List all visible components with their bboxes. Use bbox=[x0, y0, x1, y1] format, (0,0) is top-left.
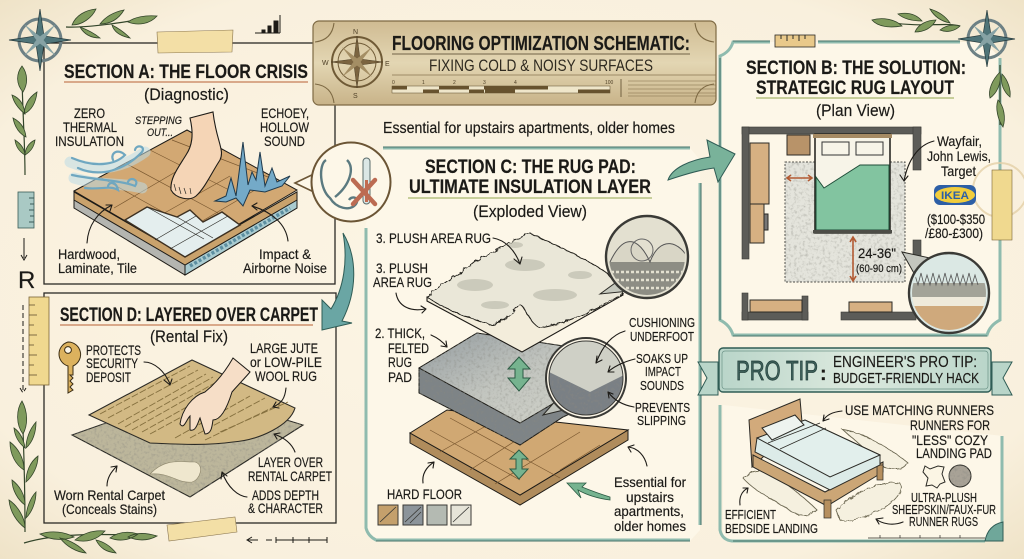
arrows: section D callouts bbox=[107, 362, 295, 497]
red dimension arrows bbox=[787, 175, 856, 281]
text: budget-friendly hack: BUDGET-FRIENDLY HACK bbox=[833, 370, 979, 387]
arrow: green from C to B bbox=[668, 140, 735, 182]
label: essential for upstairs apartments: older homes bbox=[614, 518, 686, 534]
label: thick felted rug pad: FELTED bbox=[388, 340, 429, 356]
arrow: dashed down line bbox=[20, 305, 26, 393]
tape: top section A bbox=[157, 30, 233, 53]
label: plush area rug side bbox=[373, 260, 432, 290]
label: retailers: Target bbox=[941, 163, 976, 179]
pillow bbox=[762, 415, 804, 440]
leaves: top right branch bbox=[872, 9, 960, 32]
leaves: right vertical branch bbox=[989, 65, 1010, 127]
label: ultra plush runner rugs: ULTRA-PLUSH bbox=[911, 491, 977, 505]
label: price range: /£80-£300) bbox=[925, 226, 983, 241]
icon: compass top left bbox=[9, 9, 71, 71]
heading: section B bbox=[746, 58, 966, 99]
label: thick felted rug pad: 2. THICK, bbox=[375, 325, 425, 341]
label: rug clearance dimension: (60-90 cm) bbox=[856, 263, 902, 275]
scale bar: 4 bbox=[514, 80, 517, 86]
frame bbox=[753, 455, 883, 506]
label: plush area rug side: AREA RUG bbox=[373, 274, 432, 290]
label: adds depth and character: & CHARACTER bbox=[248, 500, 323, 516]
compass rose: W bbox=[322, 60, 329, 67]
scale bar: 100 bbox=[605, 80, 614, 86]
label: cushioning underfoot: UNDERFOOT bbox=[630, 329, 694, 344]
bed with green duvet bbox=[813, 134, 892, 234]
label: efficient bedside landing: BEDSIDE LANDING bbox=[725, 522, 818, 536]
illustration: layered floor cross-section bbox=[74, 130, 297, 275]
icon: yellow ruler tape bbox=[29, 297, 49, 385]
label: layer over rental carpet: RENTAL CARPET bbox=[248, 468, 332, 484]
label: ultra plush runner rugs: RUNNER RUGS bbox=[909, 515, 978, 529]
arrow: green pointer to floor bbox=[567, 483, 610, 500]
label: large jute or low-pile wool rug: WOOL RUG bbox=[255, 368, 317, 384]
heading: section C: SECTION C: THE RUG PAD: bbox=[425, 157, 636, 178]
icon: short down arrow bbox=[21, 238, 27, 260]
label: echoey hollow sound: HOLLOW bbox=[260, 119, 310, 135]
icon: green arrow between pad and floor bbox=[510, 450, 528, 479]
label: large jute or low-pile wool rug bbox=[250, 340, 322, 384]
label: stepping out bbox=[135, 115, 182, 139]
panel: section D layered over carpet bbox=[44, 293, 336, 523]
icon: fur ball swatch bbox=[949, 465, 971, 487]
label: thick felted rug pad bbox=[375, 325, 429, 385]
label: impact and airborne noise: Airborne Noise bbox=[243, 260, 327, 276]
label: zero thermal insulation: INSULATION bbox=[55, 133, 124, 149]
letter mark R: R bbox=[18, 267, 35, 294]
legend: material swatches bbox=[378, 505, 471, 525]
label: worn rental carpet: (Conceals Stains) bbox=[62, 501, 157, 517]
label: essential for upstairs apartments: upstairs bbox=[626, 489, 674, 505]
icon: magnifier pad detail bbox=[543, 338, 626, 418]
callout: diagnostic bubble with stethoscope bbox=[295, 142, 390, 222]
label: price range: ($100-$350 bbox=[927, 212, 985, 227]
label: protects security deposit: PROTECTS bbox=[86, 342, 141, 358]
ribbon: pro tip banner bbox=[698, 348, 1012, 395]
label: zero thermal insulation: ZERO bbox=[74, 105, 105, 121]
icon: sheepskin outline bbox=[923, 466, 945, 488]
label: soaks up impact sounds bbox=[636, 351, 688, 393]
compass rose: S bbox=[353, 93, 358, 100]
leaves: left vertical branch bbox=[12, 66, 37, 175]
heading: section C bbox=[409, 157, 651, 198]
illustration: plush area rug layer bbox=[427, 233, 623, 352]
left runner bbox=[743, 471, 817, 516]
icon: sound spike wave bbox=[215, 142, 290, 206]
text: pro tip large: PRO TIP bbox=[736, 355, 818, 386]
mattress bbox=[755, 420, 880, 490]
label: echoey hollow sound: SOUND bbox=[264, 133, 305, 149]
corner: teal scale badge bbox=[985, 522, 1003, 541]
scale bar: 1 bbox=[422, 80, 425, 86]
panel: pro tip budget hack bbox=[720, 399, 1003, 541]
label: thick felted rug pad: PAD bbox=[388, 369, 412, 385]
label: layer over rental carpet: LAYER OVER bbox=[258, 454, 323, 470]
label: plush area rug side: 3. PLUSH bbox=[376, 260, 428, 276]
icon: compass top right bbox=[958, 10, 1015, 67]
label: protects security deposit bbox=[86, 342, 141, 385]
icon: gold key bbox=[59, 342, 81, 393]
icon: IKEA logo bbox=[934, 185, 976, 205]
label: stepping out: OUT... bbox=[147, 127, 173, 139]
label: echoey hollow sound: ECHOEY, bbox=[261, 105, 309, 121]
arrows: callouts to floor bbox=[87, 203, 288, 243]
icon: hand lifting rug bbox=[180, 358, 250, 434]
subtitle: essential for upstairs: Essential for upstairs apartments, older homes bbox=[383, 120, 675, 137]
label: prevents slipping bbox=[635, 400, 690, 428]
walls bbox=[742, 127, 921, 320]
arrow: retailers to rug bbox=[900, 141, 934, 181]
heading: section C: ULTIMATE INSULATION LAYER bbox=[409, 177, 651, 198]
label: efficient bedside landing: EFFICIENT bbox=[725, 508, 776, 522]
scale bar bbox=[392, 80, 614, 93]
illustration: jute rug bbox=[89, 360, 295, 444]
scale ticks: bottom ruler bbox=[868, 535, 985, 538]
label: use matching runners: RUNNERS FOR bbox=[910, 417, 990, 433]
label: worn rental carpet: Worn Rental Carpet bbox=[54, 487, 165, 503]
right runner bbox=[836, 483, 901, 521]
label: soaks up impact sounds: SOUNDS bbox=[640, 378, 684, 393]
illustration: felted rug pad layer bbox=[419, 333, 600, 445]
floor plan: bedroom bbox=[742, 127, 921, 320]
arrow: bottom scale arrow bbox=[247, 537, 327, 543]
compass rose bbox=[322, 29, 390, 100]
headboard bbox=[749, 399, 802, 467]
label: prevents slipping: SLIPPING bbox=[637, 413, 686, 428]
icon: magnifier rug profile bbox=[902, 252, 989, 333]
label: protects security deposit: DEPOSIT bbox=[86, 369, 131, 385]
title text: FLOORING OPTIMIZATION SCHEMATIC: bbox=[392, 33, 690, 55]
subheading: rental fix: (Rental Fix) bbox=[150, 327, 228, 346]
label: retailers: John Lewis, bbox=[927, 148, 991, 164]
label: zero thermal insulation: THERMAL bbox=[63, 119, 117, 135]
text: engineer's pro tip heading: ENGINEER'S PRO TIP: bbox=[833, 354, 977, 371]
illustration: worn rental carpet bbox=[72, 418, 303, 497]
label: hardwood laminate tile: Laminate, Tile bbox=[58, 260, 137, 276]
label: retailers bbox=[927, 133, 991, 179]
back runner bbox=[843, 430, 907, 469]
subheading: diagnostic: (Diagnostic) bbox=[144, 85, 229, 104]
label: efficient bedside landing bbox=[725, 508, 818, 536]
label: zero thermal insulation bbox=[55, 105, 124, 149]
icon: teal ruler left bbox=[18, 192, 34, 228]
label: rug clearance dimension bbox=[856, 245, 902, 275]
icon: magnifier rug fibers bbox=[600, 216, 690, 298]
label: soaks up impact sounds: SOAKS UP bbox=[636, 351, 688, 366]
scale bar: 0 bbox=[392, 80, 395, 86]
icon: cold wind bbox=[70, 146, 145, 190]
tape: yellow strip bbox=[992, 170, 1012, 240]
label: retailers: Wayfair, bbox=[937, 133, 982, 149]
heading: section B: STRATEGIC RUG LAYOUT bbox=[756, 78, 954, 99]
label: adds depth and character bbox=[248, 487, 323, 516]
panel: section C rug pad bbox=[365, 147, 701, 541]
label: use matching runners bbox=[845, 402, 994, 461]
label: impact and airborne noise: Impact & bbox=[259, 246, 312, 262]
scale bar: 3 bbox=[483, 80, 486, 86]
label: worn rental carpet bbox=[54, 487, 165, 517]
label: cushioning underfoot bbox=[629, 315, 695, 344]
label: essential for upstairs apartments bbox=[614, 474, 686, 534]
heading: section B: SECTION B: THE SOLUTION: bbox=[746, 58, 966, 79]
label: large jute or low-pile wool rug: or LOW-PILE bbox=[250, 354, 322, 370]
label: hard floor: HARD FLOOR bbox=[387, 486, 462, 502]
compass rose: E bbox=[385, 61, 390, 68]
arrow: teal swoosh from A to D bbox=[322, 233, 354, 330]
label: impact and airborne noise bbox=[243, 246, 327, 276]
label: large jute or low-pile wool rug: LARGE JUTE bbox=[250, 340, 318, 356]
icon: small bar chart mark bbox=[255, 15, 280, 33]
leaves: bottom horizontal branch bbox=[24, 531, 157, 553]
ruler tag: top of section B bbox=[775, 35, 815, 47]
label: layer over rental carpet bbox=[248, 454, 332, 484]
decorative coffee ring bbox=[973, 163, 1024, 217]
label: prevents slipping: PREVENTS bbox=[635, 400, 690, 415]
icon: bed illustration with runners bbox=[743, 399, 907, 521]
leaves: bottom left vertical branch bbox=[9, 401, 38, 532]
area rug under bed bbox=[785, 162, 905, 282]
label: rug clearance dimension: 24-36" bbox=[858, 245, 896, 261]
subheading: exploded view: (Exploded View) bbox=[473, 202, 587, 221]
icon: green arrow between rug and pad bbox=[508, 357, 530, 391]
icon: IKEA logo: IKEA bbox=[941, 190, 969, 202]
label: hardwood laminate tile bbox=[58, 246, 137, 276]
label: essential for upstairs apartments: Essential for bbox=[614, 474, 686, 490]
label: use matching runners: "LESS" COZY bbox=[912, 432, 989, 448]
label: price range bbox=[925, 212, 985, 241]
heading: section A: SECTION A: THE FLOOR CRISIS bbox=[64, 62, 308, 83]
label: plush area rug top: 3. PLUSH AREA RUG bbox=[376, 230, 491, 246]
leaves: top left branch bbox=[66, 9, 157, 38]
label: ultra plush runner rugs bbox=[892, 491, 996, 529]
tape: bottom section D bbox=[167, 517, 237, 541]
furniture: wardrobe, desk, nightstand, dresser bbox=[750, 135, 892, 312]
panel: section B strategic rug layout bbox=[720, 35, 1024, 336]
label: protects security deposit: SECURITY bbox=[86, 355, 138, 371]
icon: bare foot bbox=[171, 112, 221, 199]
illustration: hard floor layer bbox=[410, 410, 628, 505]
subheading: plan view: (Plan View) bbox=[816, 101, 895, 120]
label: essential for upstairs apartments: apartments, bbox=[614, 503, 684, 519]
scale bar: 2 bbox=[453, 80, 456, 86]
text: colon: : bbox=[820, 363, 827, 385]
label: cushioning underfoot: CUSHIONING bbox=[629, 315, 695, 330]
label: echoey hollow sound bbox=[260, 105, 310, 149]
subtitle text: FIXING COLD & NOISY SURFACES bbox=[429, 56, 653, 75]
panel: section A the floor crisis bbox=[44, 43, 335, 284]
label: use matching runners: USE MATCHING RUNNERS bbox=[845, 402, 994, 418]
compass rose: N bbox=[353, 29, 358, 36]
label: hardwood laminate tile: Hardwood, bbox=[58, 246, 120, 262]
arrows: section C callouts bbox=[396, 238, 647, 483]
label: stepping out: STEPPING bbox=[135, 115, 182, 127]
heading: section D: SECTION D: LAYERED OVER CARPET bbox=[60, 305, 318, 326]
label: thick felted rug pad: RUG bbox=[388, 354, 412, 370]
label: adds depth and character: ADDS DEPTH bbox=[252, 487, 319, 503]
label: use matching runners: LANDING PAD bbox=[916, 445, 992, 461]
label: soaks up impact sounds: IMPACT bbox=[645, 364, 681, 379]
title plaque bbox=[313, 21, 716, 105]
arrows: pro tip callouts bbox=[740, 411, 903, 524]
